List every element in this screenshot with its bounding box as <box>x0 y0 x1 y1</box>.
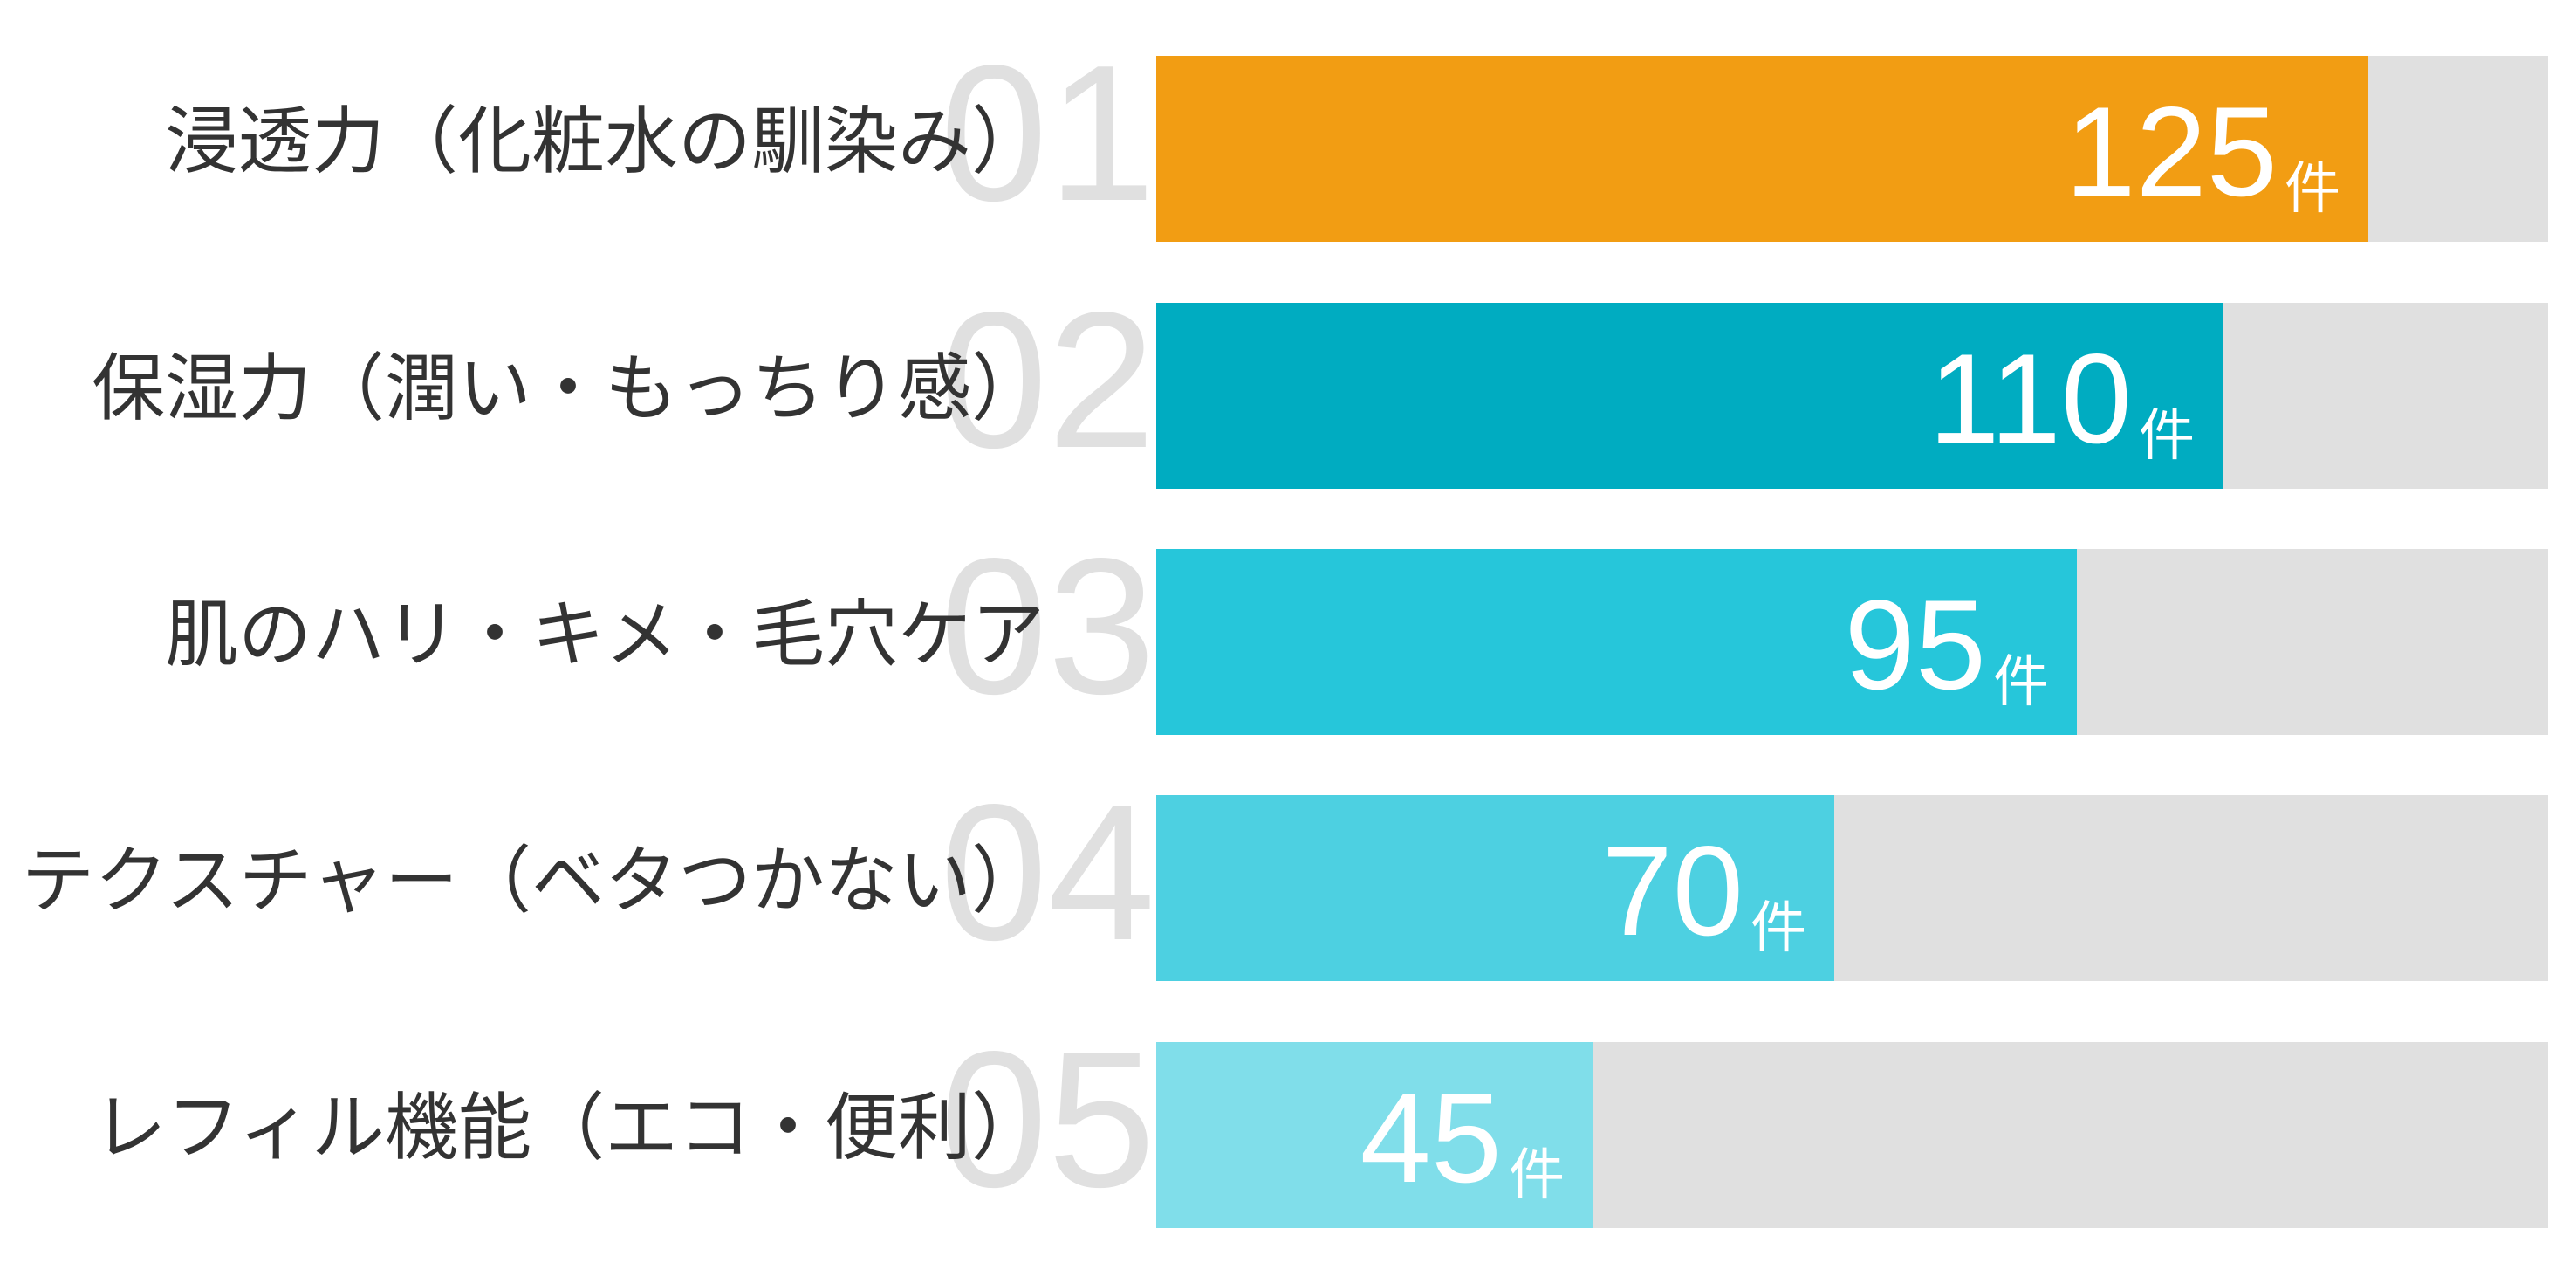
row 5 <box>93 1012 2548 1228</box>
bar 2: 110 <box>1929 327 2132 470</box>
label 1: 浸透力（化粧水の馴染み） <box>165 83 1045 189</box>
row 3 <box>165 518 2548 735</box>
bar 3: 件 <box>1993 637 2049 717</box>
label 5: レフィル機能（エコ・便利） <box>93 1069 1045 1175</box>
bar 1: 件 <box>2285 144 2340 224</box>
bar 4: 件 <box>1750 883 1806 964</box>
row 2 <box>92 272 2548 489</box>
bar 1: 125 <box>2065 80 2278 223</box>
rank number 02: 02 <box>940 272 1155 489</box>
label 2: 保湿力（潤い・もっちり感） <box>92 330 1045 436</box>
rank number 05: 05 <box>940 1012 1155 1228</box>
rank number 01: 01 <box>940 25 1155 242</box>
bar 5: 45 <box>1360 1067 1502 1209</box>
bar 3 <box>1156 549 2548 735</box>
bar 4 <box>1156 795 2548 981</box>
bar 2 <box>1156 303 2548 489</box>
row 4 <box>21 765 2548 981</box>
bar 3: 95 <box>1845 573 1986 716</box>
bar 5 <box>1156 1042 2548 1228</box>
label 4: テクスチャー（ベタつかない） <box>21 822 1045 928</box>
bar 1 <box>1156 56 2548 242</box>
label 3: 肌のハリ・キメ・毛穴ケア <box>165 576 1045 682</box>
rank number 03: 03 <box>940 518 1155 735</box>
bar 5: 件 <box>1509 1130 1565 1211</box>
row 1 <box>165 25 2548 242</box>
bar 2: 件 <box>2139 391 2195 471</box>
bar 4: 70 <box>1602 820 1744 962</box>
rank number 04: 04 <box>940 765 1155 981</box>
